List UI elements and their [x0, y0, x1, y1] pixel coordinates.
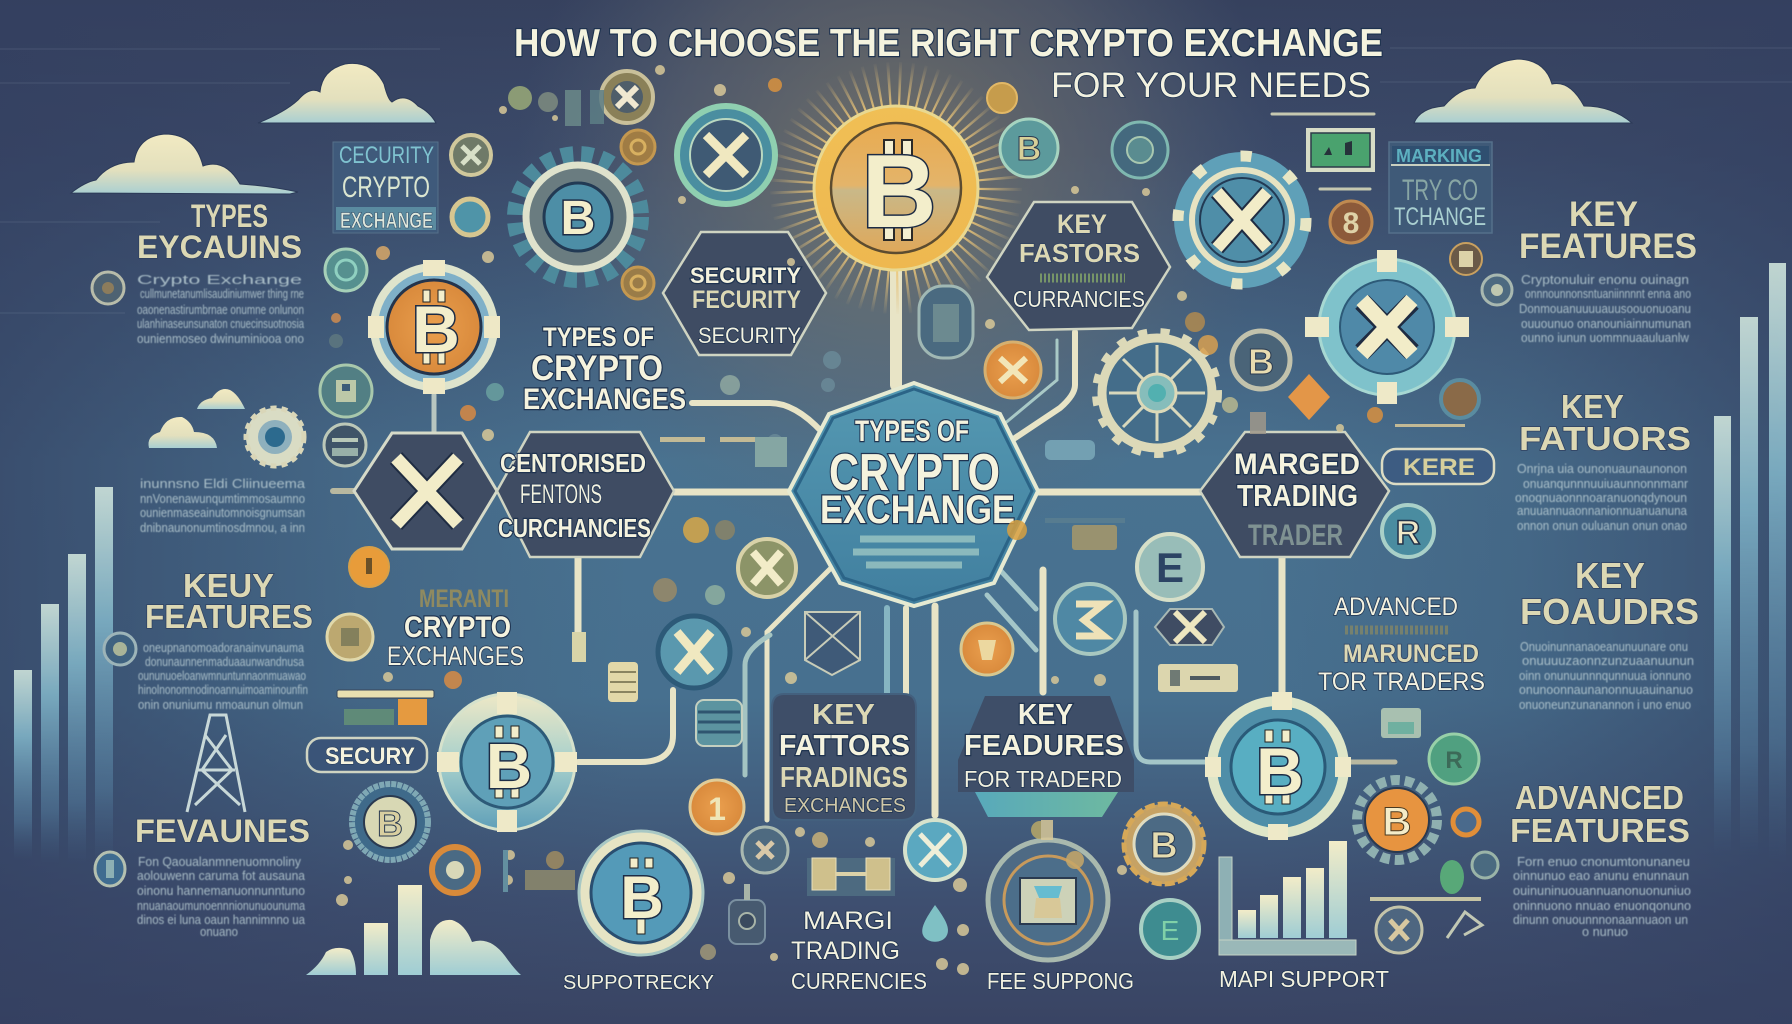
text block: right fatuors: FATUORS — [1519, 420, 1691, 457]
text block: right advanced features: o nunuo — [1582, 924, 1628, 939]
label box: try co tchange: TRY CO — [1402, 174, 1478, 207]
label: types of crypto exchanges: EXCHANGES — [523, 383, 686, 416]
label: advanced marunced for traders: MARUNCED — [1343, 640, 1479, 668]
text: key factors box — [772, 694, 916, 820]
label: crypto exchanges lower left: MERANTI — [419, 585, 509, 613]
text block: left types exchanges: cullmunetanumlisaudiniumwer thing rne — [140, 286, 304, 301]
label: advanced marunced for traders: ADVANCED — [1334, 593, 1458, 621]
icon: exchange building — [807, 858, 895, 896]
small coins: B — [1150, 825, 1178, 867]
label: types of crypto exchanges: CRYPTO — [531, 349, 663, 388]
label box: security crypto exchange — [333, 142, 438, 233]
gear: right of key factors — [1097, 333, 1217, 453]
small coins — [92, 71, 1512, 958]
text block: right key features: onnnounnonsntuaniinnnnt enna ano — [1525, 286, 1691, 301]
central hexagon: types of crypto exchange — [789, 383, 1038, 606]
text block: right foauders: oinn onunuunnnqunnuua ionnuno — [1519, 668, 1691, 683]
text block: right fatuors: anuuannuaonnanionnuanuanuna — [1517, 503, 1688, 518]
text block: right foauders: onuoneunzunanannon i uno enuo — [1519, 697, 1691, 712]
large bitcoin coin: bottom: B — [620, 864, 664, 931]
gear coin: orange bitcoin — [368, 260, 500, 394]
text: key features box: FOR TRADERD — [964, 766, 1122, 792]
small coins: B — [1017, 130, 1041, 168]
gear coin: top-right X — [1174, 152, 1310, 288]
hexagon: security: SECURITY — [690, 263, 801, 288]
label: crypto exchanges lower left: EXCHANGES — [387, 641, 524, 671]
text block: right fatuors — [1515, 388, 1691, 533]
text: key factors box: FATTORS — [779, 730, 910, 762]
small coins: B — [377, 803, 403, 844]
text block: left fevaunes: Fon Qaoualanmnenuomnoliny — [138, 854, 301, 869]
icon: green screen — [1306, 128, 1375, 172]
text block: right key features: ouuounuo onanouniainnumunan — [1521, 316, 1691, 331]
text block: right advanced features: Forn enuo cnonumtonunaneu — [1517, 854, 1690, 869]
text block: left middle lines: inunnsno Eldi Cliinueema — [140, 476, 306, 491]
small coins: E — [1156, 544, 1184, 591]
text block: left key features: FEATURES — [145, 598, 313, 635]
text block: right advanced features: ADVANCED — [1515, 779, 1684, 816]
gear coin: right X — [1305, 250, 1469, 404]
gear coin: top-left bitcoin: B — [561, 192, 595, 245]
text: key factors box: KEY — [812, 699, 875, 731]
bottom labels: MAPI SUPPORT — [1219, 966, 1389, 992]
text block: left middle lines: ounienmaseainutomnoisgnumsan — [140, 505, 305, 520]
hexagon: security — [663, 232, 826, 355]
text block: right key features: ounno iunun uommnuaauluanlw — [1521, 330, 1690, 345]
main bitcoin coin with rays — [794, 86, 998, 290]
icon: coin stack left — [572, 632, 638, 702]
text block: left key features — [138, 567, 313, 712]
text: key factors box: EXCHANCES — [784, 795, 906, 817]
hexagon: key factors: FASTORS — [1019, 238, 1140, 268]
title — [514, 22, 1383, 105]
text block: right foauders: Onuoinunnanaoeanunuunare onu — [1520, 639, 1688, 654]
text: key features box: FEADURES — [964, 730, 1124, 762]
text block: left fevaunes: aolouwenn caruma fot ausauna — [137, 868, 306, 883]
large bitcoin coin: bottom — [579, 831, 703, 955]
text block: left types exchanges: oaonenastirumbrnae onumne onlunon — [137, 302, 304, 317]
label: crypto exchanges lower left: CRYPTO — [404, 611, 511, 644]
small coins: 8 — [1343, 207, 1359, 240]
text block: right fatuors: onoqnuaonnnoaranuonqdynoun — [1515, 490, 1687, 505]
label box: try co tchange — [1389, 142, 1492, 233]
text block: right key features: Cryptonuluir enonu ouinagn — [1521, 272, 1689, 287]
text block: left key features: donunaunnenmaduaaunwandnusa — [145, 654, 305, 669]
bitcoin node: lower left — [437, 692, 577, 832]
main bitcoin coin with rays: B — [861, 134, 937, 250]
small coins: E — [1161, 915, 1179, 946]
hexagon: centralised — [497, 432, 674, 557]
text block: right key features: FEATURES — [1519, 227, 1697, 266]
central hexagon: types of crypto exchange: EXCHANGE — [820, 488, 1015, 532]
text block: right advanced features — [1510, 779, 1691, 939]
icon: X hex partial — [1155, 609, 1224, 645]
central hexagon: types of crypto exchange: TYPES OF — [855, 415, 969, 448]
title: FOR YOUR NEEDS — [1051, 66, 1371, 105]
hexagon: marged trading: TRADING — [1237, 478, 1358, 513]
text block: left fevaunes: FEVAUNES — [135, 813, 310, 849]
text block: left types exchanges: ounienmoseo dwinuminiooa ono — [137, 331, 304, 346]
small coins: 1 — [708, 791, 726, 827]
icon: shield box with X — [805, 612, 860, 675]
hexagon: centralised: CENTORISED — [500, 448, 646, 478]
text block: right foauders: KEY — [1575, 555, 1645, 596]
bar chart: bottom left skyline — [306, 885, 521, 975]
hexagon: X — [354, 433, 497, 549]
text block: right foauders: FOAUDRS — [1520, 591, 1699, 632]
pill: security: SECURY — [325, 743, 415, 770]
hexagon: key factors: CURRANCIES — [1013, 286, 1145, 312]
text block: right advanced features: FEATURES — [1510, 812, 1690, 849]
cloud: small left — [197, 389, 245, 409]
scattered dots — [329, 65, 1465, 975]
bitcoin node: lower left: B — [486, 730, 532, 802]
connector lines — [333, 114, 1395, 820]
text block: right fatuors: Onrjna uia ounonuaunaunonon — [1517, 461, 1687, 476]
coin: X ring top — [677, 106, 775, 204]
text block: right key features: Donmouanuuuuauusoouonuoanu — [1519, 301, 1691, 316]
hexagon: security: FECURITY — [692, 286, 801, 314]
hexagon: key factors: KEY — [1057, 209, 1107, 239]
bar chart: left edge bars — [14, 487, 113, 867]
label box: security crypto exchange: CECURITY — [339, 142, 434, 169]
text block: left middle lines: dnibnaunonumtinosdmnou, a inn — [140, 520, 305, 535]
coin: X small top — [601, 71, 653, 123]
hexagon: marged trading: MARGED — [1234, 448, 1360, 481]
text block: left fevaunes — [135, 813, 310, 939]
text block: left types exchanges — [137, 198, 305, 346]
cloud: top left — [258, 63, 436, 123]
text block: left types exchanges: ulanhinaseunsunaton cnuecinsuotnosia — [137, 316, 305, 331]
text block: left middle lines: nnVonenawunqumtimmosaumno — [140, 491, 305, 506]
label: advanced marunced for traders: TOR TRADERS — [1318, 668, 1485, 696]
text block: right advanced features: oinnunuo eao anunu enunnaun — [1513, 868, 1689, 883]
coin: X teal — [905, 820, 965, 880]
hexagon: security: SECURITY — [698, 323, 801, 348]
text block: right foauders: onunoonnaunanonnuuauinanuo — [1519, 682, 1693, 697]
label box: security crypto exchange: CRYPTO — [342, 171, 430, 204]
small coins: R — [1396, 514, 1420, 552]
text block: left fevaunes: onuano — [200, 924, 238, 939]
text block: left key features: onin onuniumu nmoaunun olmun — [138, 697, 303, 712]
text block: left middle lines — [140, 476, 306, 535]
text block: right advanced features: dinunn onuounnnonaannuaon un — [1513, 912, 1688, 927]
text block: left fevaunes: nnuanaoumunoennnionunuounuma — [137, 898, 306, 913]
central hexagon: types of crypto exchange: CRYPTO — [829, 444, 1000, 502]
ring coin: square emblem — [988, 840, 1108, 960]
small coins: B — [1383, 800, 1411, 844]
text block: right foauders — [1519, 555, 1699, 712]
cloud: small left lower — [148, 417, 217, 448]
icon: lock — [729, 884, 765, 944]
bar chart: right edge bars — [1714, 263, 1786, 863]
title: HOW TO CHOOSE THE RIGHT CRYPTO EXCHANGE — [514, 22, 1383, 65]
text: key features box: KEY — [1018, 699, 1073, 731]
bottom labels: FEE SUPPONG — [987, 968, 1134, 994]
text block: left key features: hinolnonomnodinoannuimoaminounfin — [138, 682, 308, 697]
text block: right fatuors: KEY — [1561, 388, 1624, 425]
bottom labels: CURRENCIES — [791, 968, 927, 994]
text block: right fatuors: onnon onun ouluanun onun onao — [1517, 518, 1687, 533]
text block: right advanced features: ouinuninuouannuanonuonuniuo — [1513, 883, 1691, 898]
text block: right advanced features: oninnuono nnuao enuonqonuno — [1513, 898, 1691, 913]
text: key features box — [958, 696, 1134, 817]
label box: try co tchange: MARKING — [1396, 146, 1482, 166]
bottom labels: TRADING — [791, 937, 900, 965]
hexagon: centralised: CURCHANCIES — [498, 513, 651, 543]
gear coin: orange bitcoin: B — [412, 292, 460, 366]
small coins: B — [1248, 341, 1274, 382]
icons beside text blocks — [92, 272, 124, 304]
gear coin: top-left bitcoin — [515, 154, 641, 280]
text block: left types exchanges: EYCAUINS — [137, 229, 302, 265]
text block: left fevaunes: dinos ei luna oaun hannimnno ua — [137, 912, 306, 927]
text block: right key features — [1519, 195, 1697, 345]
bitcoin node: lower right — [1205, 692, 1351, 840]
icon: notepad right — [1381, 708, 1421, 738]
cloud: far left — [71, 134, 298, 194]
icon: tower — [187, 715, 245, 812]
text block: right fatuors: onuanqunnnuuiuaunnonnmanr — [1523, 476, 1689, 491]
text block: left key features: KEUY — [183, 567, 274, 604]
label box: security crypto exchange: EXCHANGE — [340, 208, 433, 233]
small coins: R — [1445, 747, 1463, 774]
pill: security — [307, 738, 427, 772]
label box: try co tchange: TCHANGE — [1394, 203, 1486, 231]
label: types of crypto exchanges — [523, 322, 686, 416]
icon: cards — [337, 690, 434, 725]
icon: server stack — [696, 700, 742, 746]
bottom labels: SUPPOTRECKY — [563, 972, 714, 994]
bottom labels — [563, 907, 1389, 994]
hexagon: key factors — [987, 202, 1170, 330]
bottom labels: MARGI — [803, 907, 893, 935]
bar chart: bottom right — [1219, 841, 1356, 955]
text block: left types exchanges: TYPES — [191, 198, 268, 234]
label: advanced marunced for traders — [1318, 593, 1485, 696]
hexagon: marged trading: TRADER — [1248, 519, 1343, 552]
text: key factors box: FRADINGS — [780, 762, 908, 794]
text block: left fevaunes: oinonu hannemanuonnunntuno — [137, 883, 305, 898]
text block: right key features: KEY — [1569, 195, 1638, 234]
pill: here — [1382, 449, 1494, 484]
text block: right foauders: onuuuuzaonnzunzuaanuunun — [1522, 653, 1694, 668]
label: crypto exchanges lower left — [387, 585, 524, 671]
icon: gear — [246, 408, 304, 466]
pill: here: KERE — [1403, 454, 1475, 481]
text block: left types exchanges: Crypto Exchange — [137, 272, 302, 287]
text block: left key features: oununuoeloanwmnuntunnaonmuawao — [138, 668, 306, 683]
bitcoin node: lower right: B — [1256, 734, 1304, 808]
hexagon: centralised: FENTONS — [520, 479, 602, 509]
label: types of crypto exchanges: TYPES OF — [543, 322, 654, 352]
icon: keycard bar — [1158, 664, 1238, 692]
text block: left key features: oneupnanomoadoranainvunauma — [143, 640, 305, 655]
hexagon: marged trading — [1200, 432, 1389, 557]
cloud: top right — [1414, 59, 1632, 123]
